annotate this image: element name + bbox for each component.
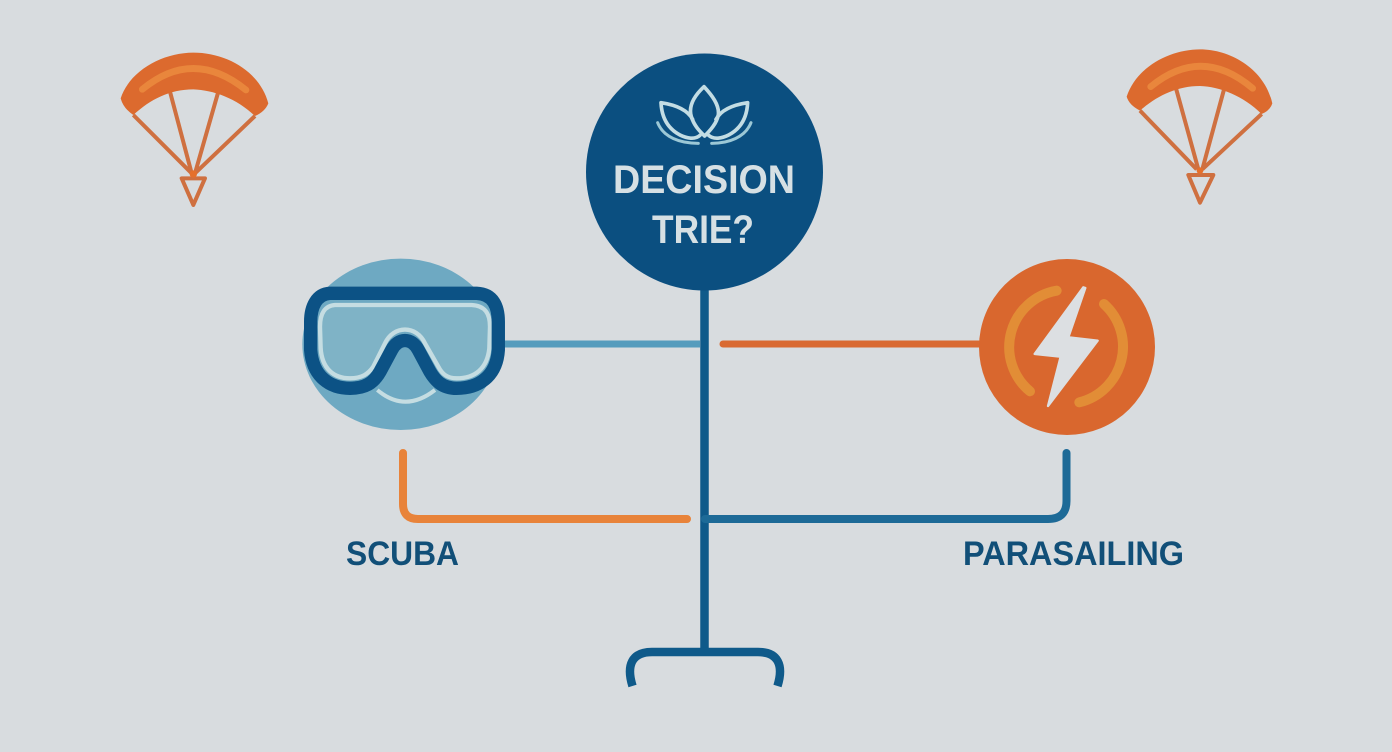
connector: orange elbow to scuba label xyxy=(403,453,687,519)
connector: parasailing icon to trunk xyxy=(723,340,985,348)
icon: lightning badge xyxy=(979,259,1155,435)
label: scuba: SCUBA xyxy=(346,535,459,573)
icon: parachute left xyxy=(121,53,268,205)
icon: scuba mask xyxy=(302,259,499,430)
decision node xyxy=(586,54,823,290)
node title line 2: TRIE? xyxy=(652,208,754,252)
connector: scuba to trunk xyxy=(500,340,700,348)
node title line 1: DECISION xyxy=(613,158,795,202)
icon: parachute right xyxy=(1127,49,1272,203)
label: parasailing: PARASAILING xyxy=(963,535,1184,573)
central trunk and stand xyxy=(630,285,780,686)
icon: lotus xyxy=(658,87,751,143)
connector: blue elbow to parasailing label xyxy=(705,453,1066,519)
